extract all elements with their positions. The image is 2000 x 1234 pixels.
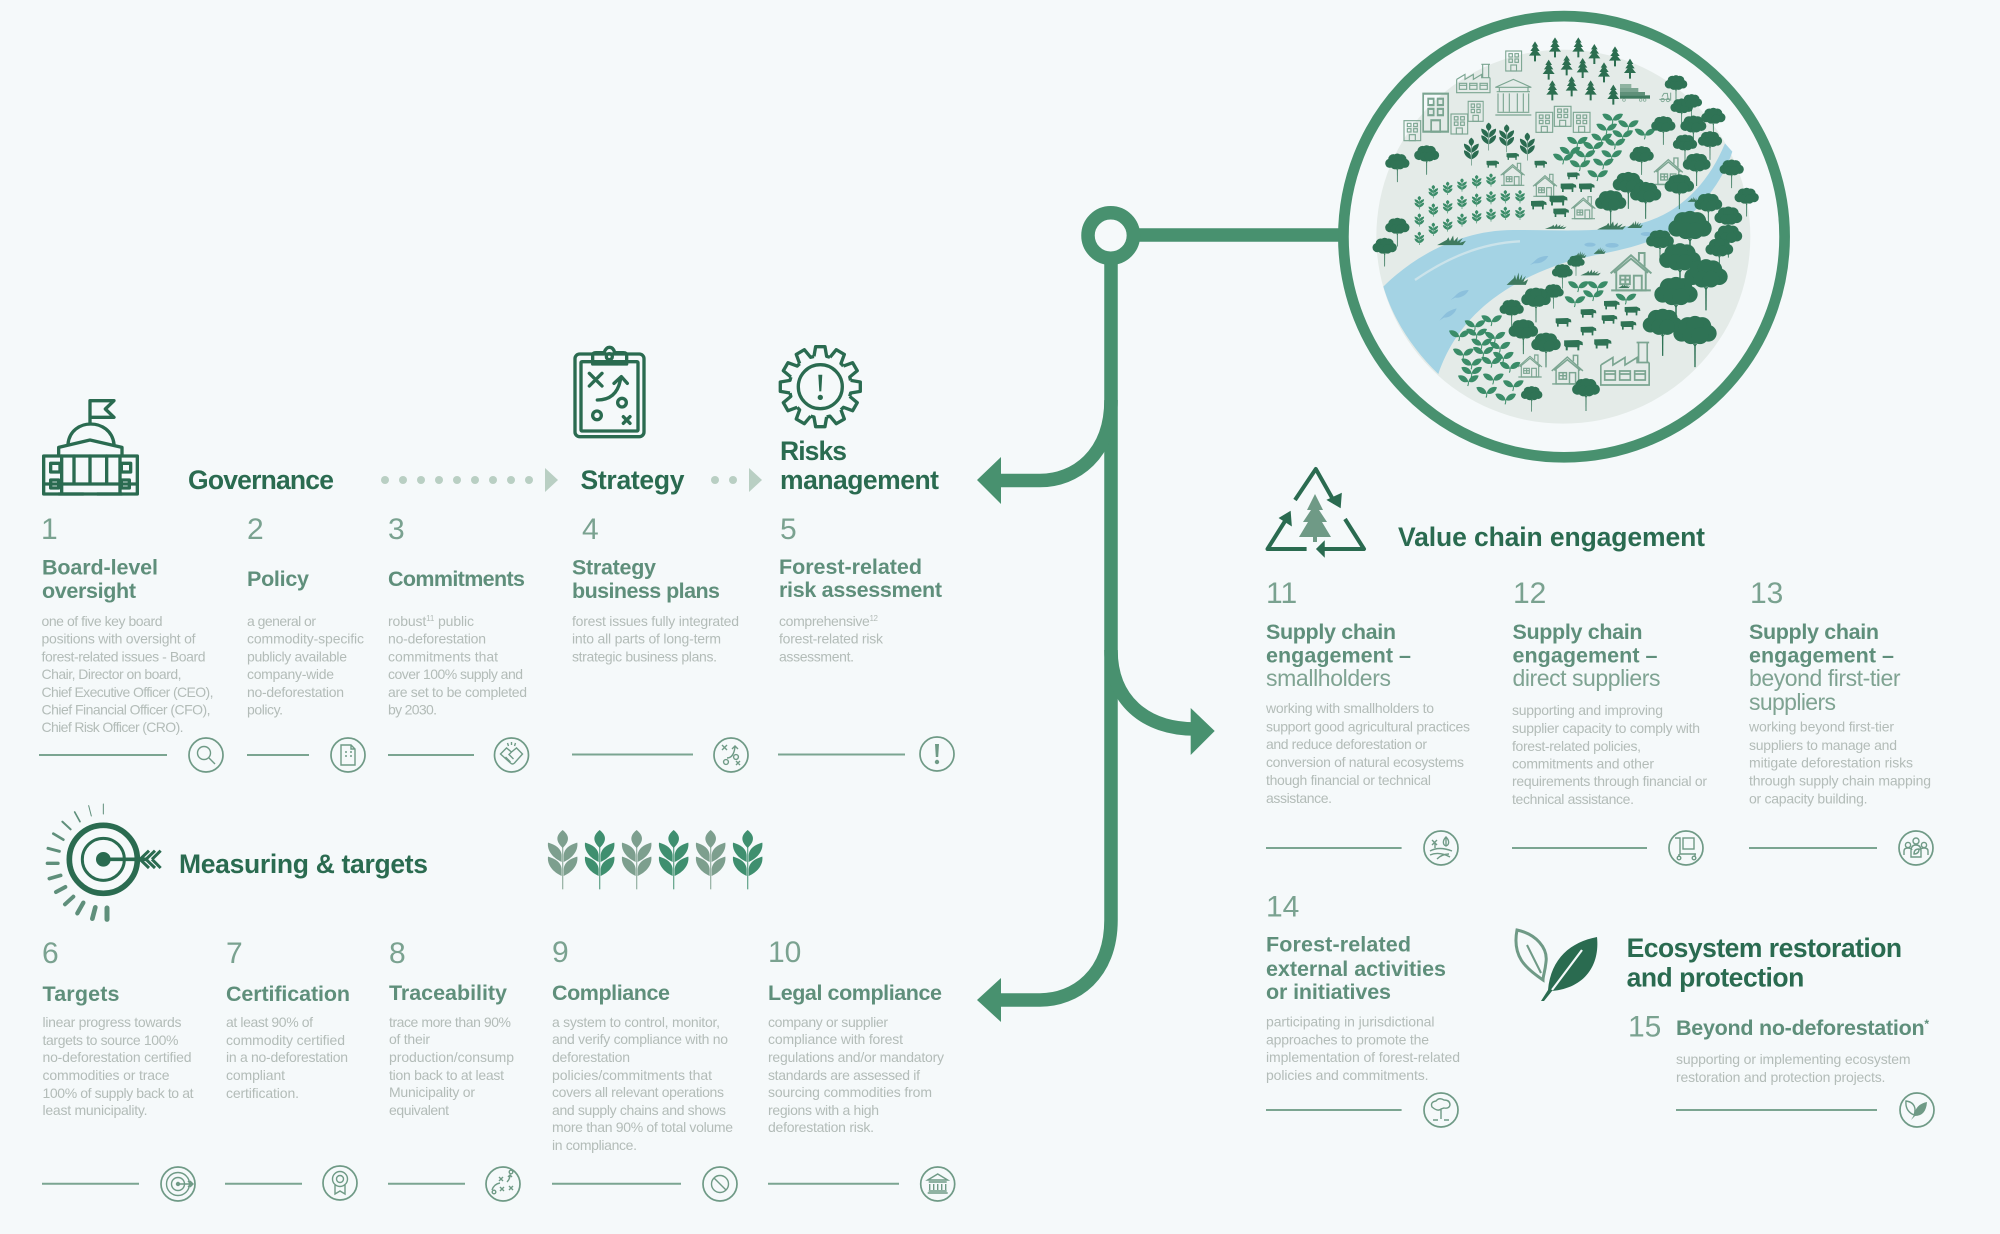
item 15: beyond no-deforestation: *	[1924, 1017, 1929, 1031]
item 8: traceability: equivalent	[389, 1102, 449, 1118]
icon: gear with exclamation	[780, 347, 860, 427]
item 5: forest-related risk assessment: 12	[869, 614, 879, 623]
item 4: strategy business plans	[572, 513, 748, 772]
item 13: supply chain beyond first-tier suppliers: through supply chain mapping	[1749, 773, 1931, 789]
item 13: supply chain beyond first-tier suppliers: Supply chain	[1749, 620, 1879, 644]
heading: risks management: management	[780, 465, 939, 495]
item 11: supply chain smallholders: working with smallholders to	[1265, 700, 1434, 716]
item 10: legal compliance: standards are assessed if	[768, 1067, 920, 1083]
item 5: forest-related risk assessment: risk assessment	[779, 578, 942, 602]
item 9: compliance: deforestation	[552, 1049, 630, 1065]
item 4: strategy business plans: forest issues fully integrated	[572, 613, 739, 629]
item 11: supply chain smallholders: engagement –	[1266, 644, 1411, 668]
item 13: supply chain beyond first-tier suppliers: working beyond first-tier	[1748, 719, 1894, 735]
item 10: legal compliance: compliance with forest	[768, 1031, 903, 1047]
item 1: board-level oversight: Chief Executive Officer (CEO),	[42, 684, 214, 700]
item 9: compliance: Compliance	[552, 981, 670, 1005]
pine trees	[1529, 37, 1636, 105]
dotted arrow to risks	[711, 468, 762, 492]
item 5: forest-related risk assessment: forest-related risk	[779, 630, 884, 646]
item 13: supply chain beyond first-tier suppliers: 13	[1750, 577, 1783, 610]
item 14: forest-related external activities: policies and commitments.	[1266, 1067, 1428, 1083]
item 6: targets: targets to source 100%	[42, 1032, 178, 1048]
item 12: supply chain direct suppliers: forest-related policies,	[1512, 738, 1641, 754]
section: ecosystem restoration and protection	[1516, 930, 1934, 1127]
item 4: strategy business plans: 4	[582, 513, 599, 546]
item 5: forest-related risk assessment	[778, 513, 954, 771]
item 3: commitments: public	[434, 613, 474, 629]
cattle	[1487, 153, 1640, 350]
item 11: supply chain smallholders: support good agricultural practices	[1266, 718, 1470, 734]
item 13: supply chain beyond first-tier suppliers	[1748, 577, 1933, 865]
item 13: supply chain beyond first-tier suppliers: suppliers	[1749, 689, 1836, 715]
item 7: certification: Certification	[226, 982, 350, 1006]
item 14: forest-related external activities: external activities	[1266, 957, 1446, 981]
item 4: strategy business plans: business plans	[572, 579, 720, 603]
icon: handshake	[494, 738, 528, 772]
item 14: forest-related external activities: 14	[1266, 891, 1299, 924]
item 7: certification: certification.	[226, 1085, 299, 1101]
item 6: targets: 6	[42, 937, 59, 970]
item 10: legal compliance: regions with a high	[768, 1102, 879, 1118]
icon: hand trolley	[1669, 831, 1703, 865]
item 9: compliance: and verify compliance with no	[552, 1031, 728, 1047]
item 9: compliance: covers all relevant operations	[552, 1084, 724, 1100]
icon: leaves	[1900, 1093, 1934, 1127]
item 6: targets	[42, 937, 195, 1201]
heading: ecosystem restoration	[1627, 933, 1902, 993]
icon: target	[161, 1167, 195, 1201]
item 2: policy: no-deforestation	[247, 684, 344, 700]
item 3: commitments: 3	[388, 513, 405, 546]
item 13: supply chain beyond first-tier suppliers: beyond first-tier	[1749, 665, 1901, 691]
item 14: forest-related external activities: or initiatives	[1266, 980, 1391, 1004]
item 7: certification: in a no-deforestation	[226, 1049, 348, 1065]
item 15: beyond no-deforestation: restoration and protection projects.	[1676, 1069, 1885, 1085]
item 7: certification: 7	[226, 937, 243, 970]
item 9: compliance: more than 90% of total volume	[552, 1119, 733, 1135]
item 2: policy: policy.	[247, 702, 283, 718]
item 2: policy: publicly available	[247, 648, 347, 664]
item 3: commitments: no-deforestation	[388, 630, 486, 646]
section: strategy	[572, 347, 762, 772]
icon: farm field	[1424, 831, 1458, 865]
heading: risks management: Risks	[780, 436, 847, 466]
item 1: board-level oversight: Board-level	[42, 556, 158, 580]
heading: strategy: Strategy	[580, 465, 685, 495]
icon: rosette badge	[323, 1166, 357, 1200]
item 8: traceability: Traceability	[389, 981, 507, 1005]
item 15: beyond no-deforestation: 15	[1628, 1011, 1661, 1044]
item 1: board-level oversight: Chief Risk Officer (CRO).	[42, 719, 184, 735]
item 11: supply chain smallholders: though financial or technical	[1266, 772, 1431, 788]
icon: bank	[921, 1167, 955, 1201]
item 5: forest-related risk assessment: comprehensive	[779, 613, 870, 629]
item 14: forest-related external activities: participating in jurisdictional	[1266, 1014, 1434, 1030]
item 12: supply chain direct suppliers: supporting and improving	[1512, 702, 1663, 718]
item 5: forest-related risk assessment: assessment.	[779, 648, 854, 664]
item 10: legal compliance: deforestation risk.	[768, 1119, 874, 1135]
item 9: compliance: policies/commitments that	[552, 1067, 712, 1083]
item 13: supply chain beyond first-tier suppliers: mitigate deforestation risks	[1749, 755, 1913, 771]
icon: tree	[1424, 1093, 1458, 1127]
item 1: board-level oversight: oversight	[42, 579, 136, 603]
item 1: board-level oversight: 1	[41, 513, 58, 546]
item 13: supply chain beyond first-tier suppliers: suppliers to manage and	[1749, 737, 1897, 753]
item 14: forest-related external activities: Forest-related	[1266, 933, 1411, 957]
heading: ecosystem restoration: and protection	[1627, 963, 1804, 993]
icon: trace plan	[486, 1167, 520, 1201]
item 12: supply chain direct suppliers: commitments and other	[1512, 756, 1654, 772]
item 3: commitments: by 2030.	[388, 702, 437, 718]
section: risks management	[778, 347, 954, 771]
flow connector with arrows	[977, 213, 1340, 1022]
icon: target with sun rays	[47, 804, 161, 919]
item 3: commitments: are set to be completed	[388, 684, 527, 700]
dotted arrow to strategy	[381, 468, 558, 492]
item 14: forest-related external activities	[1266, 891, 1460, 1127]
landscape scene	[1373, 37, 1759, 424]
item 12: supply chain direct suppliers: technical assistance.	[1512, 791, 1634, 807]
item 2: policy: company-wide	[247, 666, 334, 682]
item 9: compliance	[552, 936, 737, 1201]
item 7: certification	[225, 937, 357, 1200]
item 10: legal compliance: sourcing commodities from	[768, 1084, 932, 1100]
item 9: compliance: 9	[552, 936, 569, 969]
item 9: compliance: a system to control, monitor,	[552, 1014, 720, 1030]
icon: exclamation	[920, 737, 954, 771]
item 13: supply chain beyond first-tier suppliers: engagement –	[1749, 644, 1894, 668]
item 12: supply chain direct suppliers: requirements through financial or	[1512, 773, 1707, 789]
item 4: strategy business plans: Strategy	[572, 556, 656, 580]
item 7: certification: commodity certified	[226, 1032, 345, 1048]
leafy sprouts	[1449, 114, 1655, 404]
item 1: board-level oversight: Chair, Director on board,	[42, 666, 182, 682]
icon: recycling arrows with tree	[1268, 469, 1364, 556]
item 12: supply chain direct suppliers: supplier capacity to comply with	[1512, 720, 1700, 736]
item 11: supply chain smallholders: 11	[1266, 577, 1297, 610]
item 12: supply chain direct suppliers	[1512, 577, 1707, 865]
item 2: policy: Policy	[247, 567, 309, 591]
icon: row of wheat	[548, 830, 762, 889]
item 8: traceability	[388, 937, 520, 1201]
item 1: board-level oversight: positions with oversight of	[42, 630, 196, 646]
item 3: commitments: 11	[426, 614, 435, 623]
item 2: policy: 2	[247, 513, 264, 546]
item 2: policy	[247, 513, 365, 772]
item 5: forest-related risk assessment: 5	[780, 513, 797, 546]
item 8: traceability: production/consump	[389, 1049, 514, 1065]
icon: two leaves	[1516, 930, 1597, 1001]
heading: risks management	[780, 436, 939, 495]
item 7: certification: compliant	[226, 1067, 285, 1083]
item 12: supply chain direct suppliers: Supply chain	[1512, 620, 1642, 644]
item 3: commitments	[388, 513, 528, 772]
item 2: policy: a general or	[247, 613, 316, 629]
crops	[1464, 123, 1535, 166]
item 15: beyond no-deforestation	[1628, 1011, 1934, 1127]
item 12: supply chain direct suppliers: 12	[1513, 577, 1546, 610]
item 12: supply chain direct suppliers: engagement –	[1512, 644, 1658, 668]
item 6: targets: 100% of supply back to at	[42, 1085, 194, 1101]
item 11: supply chain smallholders	[1265, 577, 1470, 865]
item 4: strategy business plans: into all parts of long-term	[572, 630, 721, 646]
item 8: traceability: tion back to at least	[389, 1067, 504, 1083]
icon: prohibition sign	[703, 1167, 737, 1201]
section: value chain engagement	[1265, 469, 1933, 1127]
icon: magnifier	[189, 738, 223, 772]
heading: value chain engagement: Value chain engagement	[1398, 522, 1705, 552]
item 1: board-level oversight	[39, 513, 223, 772]
heading: governance: Governance	[188, 465, 334, 495]
item 10: legal compliance: regulations and/or mandatory	[768, 1049, 944, 1065]
icon: capitol building	[44, 401, 137, 494]
item 8: traceability: Municipality or	[389, 1084, 475, 1100]
item 10: legal compliance: Legal compliance	[768, 981, 942, 1005]
item 6: targets: least municipality.	[42, 1102, 148, 1118]
item 11: supply chain smallholders: Supply chain	[1266, 620, 1396, 644]
item 8: traceability: of their	[389, 1031, 430, 1047]
buildings	[1404, 51, 1683, 385]
section: governance	[39, 401, 558, 772]
item 10: legal compliance: company or supplier	[768, 1014, 888, 1030]
item 7: certification: at least 90% of	[226, 1014, 313, 1030]
item 9: compliance: in compliance.	[552, 1137, 637, 1153]
illustration ring	[1343, 16, 1785, 457]
item 1: board-level oversight: one of five key board	[42, 613, 162, 629]
item 13: supply chain beyond first-tier suppliers: or capacity building.	[1749, 791, 1868, 807]
item 6: targets: commodities or trace	[42, 1067, 170, 1083]
item 6: targets: Targets	[42, 982, 120, 1006]
item 15: beyond no-deforestation: supporting or implementing ecosystem	[1676, 1051, 1911, 1067]
section: measuring and targets	[42, 804, 955, 1201]
heading: ecosystem restoration: Ecosystem restoration	[1627, 933, 1902, 963]
icon: clipboard plan	[575, 347, 644, 437]
item 10: legal compliance	[768, 936, 955, 1201]
item 1: board-level oversight: Chief Financial Officer (CFO),	[42, 702, 210, 718]
item 1: board-level oversight: forest-related issues - Board	[42, 648, 206, 664]
icon: document	[331, 738, 365, 772]
icon: plan	[714, 738, 748, 772]
item 3: commitments: robust	[388, 613, 426, 629]
item 15: beyond no-deforestation: Beyond no-deforestation	[1676, 1016, 1925, 1040]
item 4: strategy business plans: strategic business plans.	[572, 648, 717, 664]
item 11: supply chain smallholders: smallholders	[1266, 665, 1391, 691]
item 12: supply chain direct suppliers: direct suppliers	[1512, 665, 1660, 691]
item 11: supply chain smallholders: conversion of natural ecosystems	[1266, 754, 1464, 770]
item 8: traceability: 8	[389, 937, 406, 970]
item 14: forest-related external activities: implementation of forest-related	[1266, 1049, 1460, 1065]
item 5: forest-related risk assessment: Forest-related	[779, 555, 922, 579]
item 2: policy: commodity-specific	[247, 630, 364, 646]
canopy trees	[1373, 75, 1759, 412]
item 8: traceability: trace more than 90%	[389, 1014, 511, 1030]
icon: people with leaf	[1899, 831, 1933, 865]
item 10: legal compliance: 10	[768, 936, 801, 969]
item 11: supply chain smallholders: and reduce deforestation or	[1266, 736, 1427, 752]
heading: measuring and targets: Measuring & targets	[179, 849, 428, 879]
item 9: compliance: and supply chains and shows	[552, 1102, 726, 1118]
item 3: commitments: cover 100% supply and	[388, 666, 523, 682]
item 3: commitments: commitments that	[388, 648, 498, 664]
item 14: forest-related external activities: approaches to promote the	[1266, 1032, 1429, 1048]
landscape illustration in circle	[1343, 16, 1785, 457]
item 6: targets: no-deforestation certified	[42, 1049, 192, 1065]
item 3: commitments: Commitments	[388, 567, 525, 591]
item 11: supply chain smallholders: assistance.	[1266, 790, 1332, 806]
log truck and forklift	[1620, 84, 1671, 102]
item 6: targets: linear progress towards	[42, 1014, 182, 1030]
